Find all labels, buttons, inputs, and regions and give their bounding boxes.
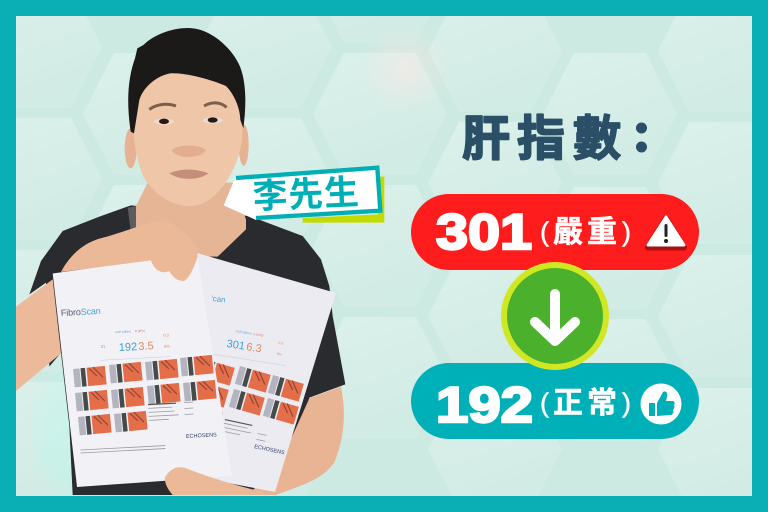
score 192 3.5: CAP (dB/m) xyxy=(115,329,131,334)
front paper xyxy=(53,253,232,487)
label: ) xyxy=(622,217,631,247)
mouth xyxy=(169,170,208,179)
title: 肝 xyxy=(462,99,510,169)
logo: ECHOSENS xyxy=(254,444,285,456)
brows xyxy=(149,103,227,109)
score 301 6.3: 0.3 xyxy=(278,341,284,346)
score 301 6.3: 9% xyxy=(276,352,282,357)
ears xyxy=(125,124,249,168)
hair xyxy=(128,28,245,133)
label xyxy=(540,378,631,422)
logo: ECHOSENS xyxy=(186,432,217,440)
label: ( xyxy=(540,217,549,247)
title xyxy=(462,99,647,169)
score 192 3.5 xyxy=(99,327,171,361)
eyes xyxy=(154,117,223,125)
person xyxy=(16,28,345,495)
title: 指 xyxy=(517,99,565,169)
value 192: 192 xyxy=(436,377,533,433)
upper hand xyxy=(61,219,198,281)
tag box xyxy=(224,165,381,220)
logo fragment: 'can xyxy=(211,294,226,304)
normal pill xyxy=(411,363,699,439)
left arm xyxy=(16,279,61,391)
measurement lines xyxy=(78,402,195,453)
score 301 6.3: 6.3 xyxy=(245,341,262,355)
label: 嚴 xyxy=(553,207,583,251)
score 301 6.3: 301 xyxy=(226,338,246,353)
ultrasound tiles xyxy=(187,359,304,431)
collar xyxy=(128,206,136,233)
nose xyxy=(172,145,206,157)
name tag xyxy=(224,164,384,223)
shirt xyxy=(29,205,345,495)
hands xyxy=(61,219,264,495)
name: 李先生 xyxy=(252,164,361,219)
score 192 3.5: 31 xyxy=(101,344,106,349)
label: ( xyxy=(540,388,549,418)
back paper xyxy=(160,253,336,492)
score 192 3.5: 0.3 xyxy=(163,332,170,338)
logo: FibroScan xyxy=(61,306,101,318)
label: 重 xyxy=(587,207,617,251)
score 301 6.3 xyxy=(213,326,290,366)
score 192 3.5: 192 xyxy=(119,341,138,354)
head xyxy=(125,28,249,206)
body xyxy=(16,183,345,495)
neck xyxy=(136,183,246,257)
label: 正 xyxy=(553,378,583,422)
lime shadow xyxy=(303,177,384,223)
score 192 3.5: E (kPa) xyxy=(135,329,145,333)
value 301: 301 xyxy=(436,204,532,260)
icon: down arrow xyxy=(535,294,575,341)
label: ) xyxy=(622,388,631,418)
lower hand xyxy=(165,467,264,495)
arrow circle xyxy=(504,265,606,367)
icon: warning triangle xyxy=(648,217,684,248)
label: 常 xyxy=(587,378,617,422)
score 192 3.5: 6% xyxy=(164,343,170,349)
score 301 6.3: E (kPa) xyxy=(253,332,264,338)
score 192 3.5: 3.5 xyxy=(138,340,154,353)
title: 數 xyxy=(573,99,621,169)
label xyxy=(540,207,631,251)
severe pill xyxy=(411,194,699,270)
ultrasound tiles xyxy=(73,355,217,435)
right arm xyxy=(249,387,344,495)
face xyxy=(133,63,243,206)
score 301 6.3: CAP (dB/m) xyxy=(235,329,252,336)
measurement lines xyxy=(222,419,268,442)
icon: thumbs up xyxy=(640,384,682,424)
